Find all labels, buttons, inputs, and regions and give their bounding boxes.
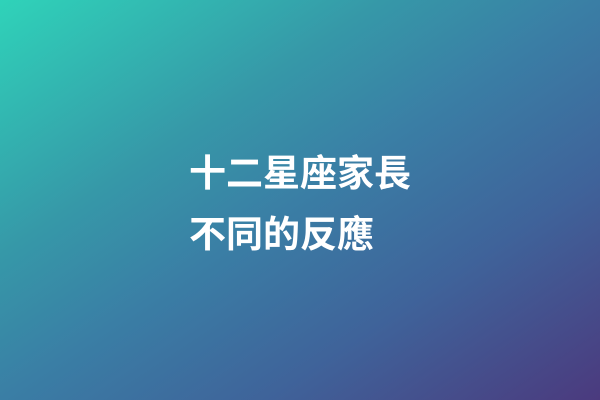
title line 1: 十二星座家長: [189, 153, 411, 194]
title: [189, 153, 411, 255]
title line 2: 不同的反應: [189, 214, 374, 255]
